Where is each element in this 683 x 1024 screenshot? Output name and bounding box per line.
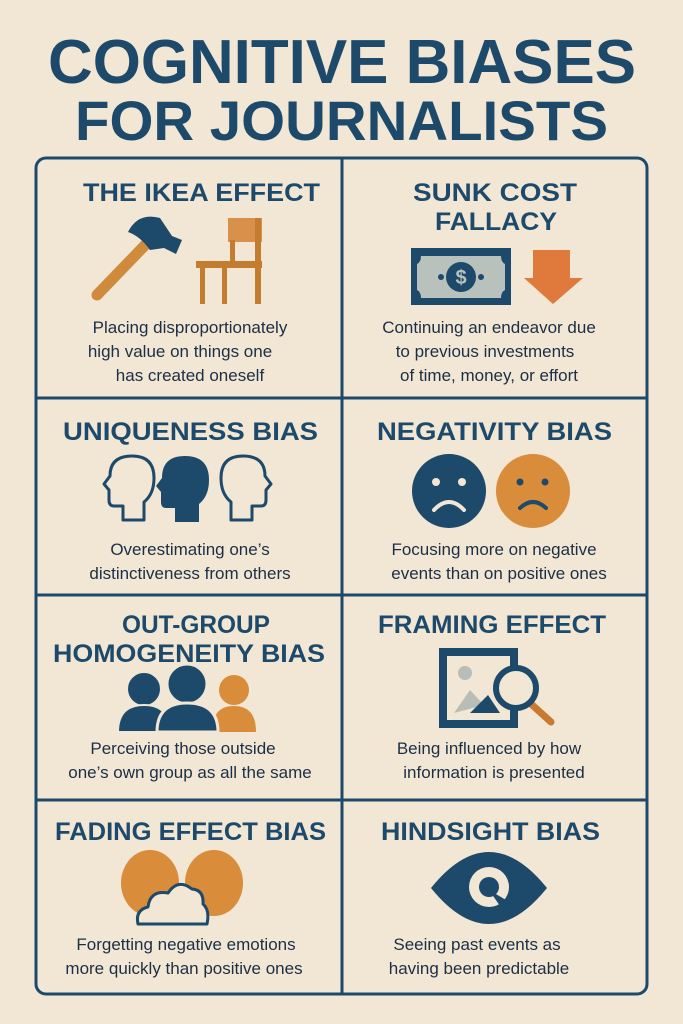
heading: HINDSIGHT BIAS (381, 818, 600, 846)
panel: fading effect bias (55, 818, 326, 978)
panel: uniqueness bias (63, 418, 318, 583)
heading: NEGATIVITY BIAS (377, 418, 612, 446)
icon: eye (431, 852, 547, 924)
icon: chair (196, 218, 262, 304)
description: to previous investments (396, 342, 574, 361)
panel: hindsight bias (381, 818, 600, 978)
title (48, 28, 636, 152)
heading: FADING EFFECT BIAS (55, 818, 326, 846)
description: Overestimating one’s (110, 540, 270, 559)
icon: money: $ (455, 267, 467, 289)
description: Seeing past events as (393, 935, 561, 954)
panel: ikea effect (83, 179, 320, 385)
heading: UNIQUENESS BIAS (63, 418, 318, 446)
panel: out-group homogeneity bias: HOMOGENEITY BIAS (53, 640, 325, 668)
description: of time, money, or effort (400, 366, 578, 385)
panel: negativity bias (377, 418, 612, 583)
description: Placing disproportionately (93, 318, 288, 337)
description: high value on things one (88, 342, 272, 361)
description: having been predictable (389, 959, 569, 978)
icon: people (118, 664, 256, 732)
description: Continuing an endeavor due (382, 318, 596, 337)
panel: framing effect (378, 611, 606, 782)
panel: out-group homogeneity bias (53, 611, 325, 782)
icon: down arrow (524, 250, 583, 304)
description: one’s own group as all the same (68, 763, 312, 782)
panel: sunk cost fallacy (382, 179, 596, 385)
description: has created oneself (116, 366, 264, 385)
icon: money (411, 248, 511, 305)
icon: circles with cloud (121, 850, 243, 924)
icon: framed picture with magnifier (443, 652, 551, 724)
icon: sad faces (412, 454, 570, 528)
description: Perceiving those outside (90, 739, 276, 758)
heading: sunk cost fallacy: SUNK COST (413, 179, 577, 207)
description: events than on positive ones (391, 564, 607, 583)
description: Being influenced by how (397, 739, 582, 758)
panel: sunk cost fallacy: FALLACY (435, 208, 557, 236)
description: distinctiveness from others (89, 564, 291, 583)
title: FOR JOURNALISTS (75, 89, 608, 152)
heading: OUT-GROUP (122, 611, 270, 639)
description: information is presented (403, 763, 585, 782)
description: Focusing more on negative (391, 540, 597, 559)
heading: the ikea effect: THE IKEA EFFECT (83, 179, 320, 207)
heading: FRAMING EFFECT (378, 611, 606, 639)
icon: hammer (97, 217, 182, 295)
description: Forgetting negative emotions (76, 935, 296, 954)
title: COGNITIVE BIASES (48, 28, 636, 97)
description: more quickly than positive ones (65, 959, 303, 978)
icon: heads (104, 456, 271, 522)
grid frame (36, 158, 647, 994)
